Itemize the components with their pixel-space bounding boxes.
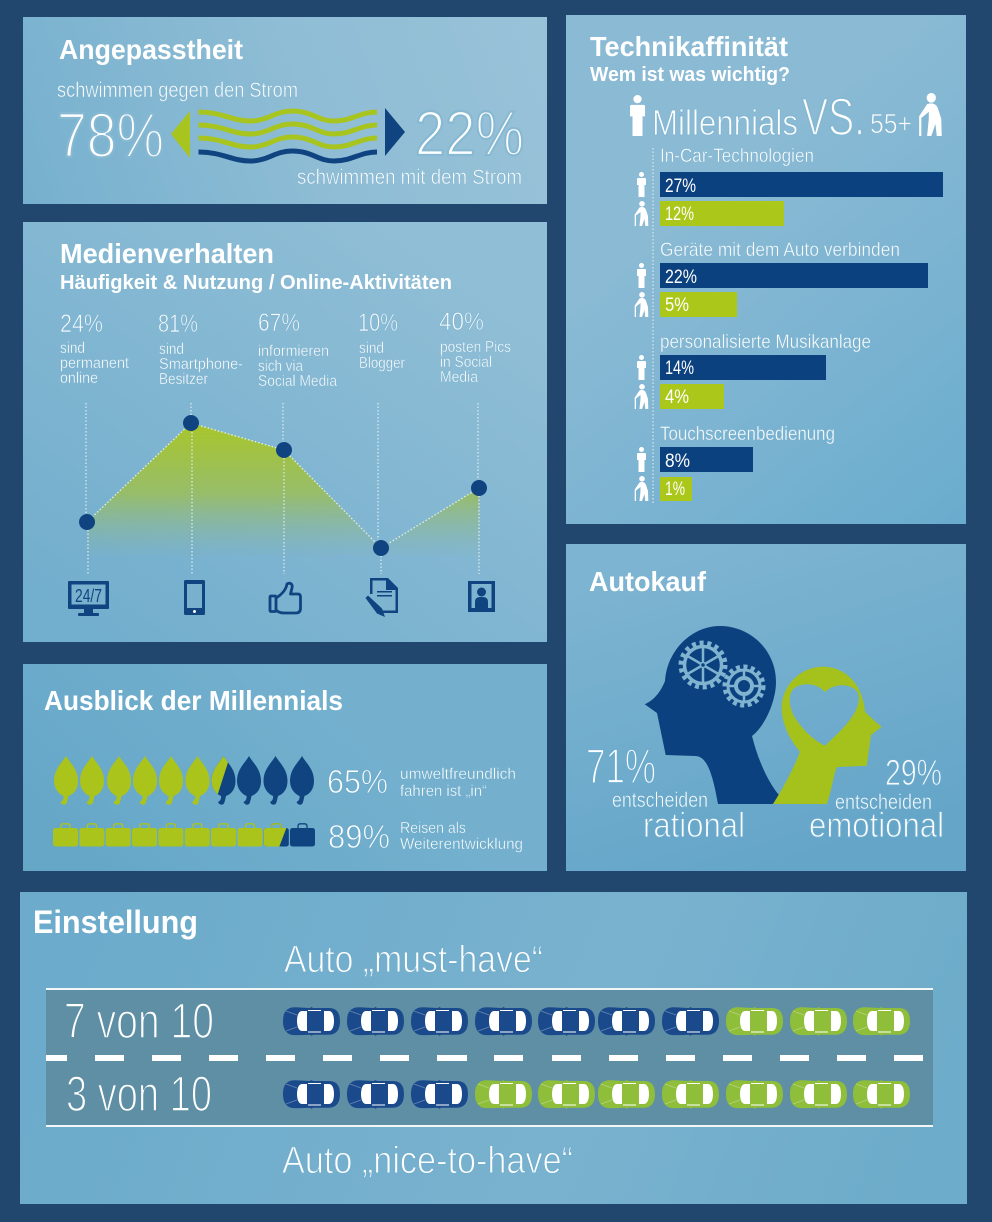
bar group: Geräte mit dem Auto verbinden: 5% [665,295,689,316]
bar group: Geräte mit dem Auto verbinden [635,239,928,317]
stat: 29% entscheiden emotional: 29% [885,752,942,793]
bar group: In-Car-Technologien: 12% [665,204,694,225]
stat: 3 von 10: 3 von 10 [66,1066,212,1122]
icon: green head with heart [773,667,882,804]
stat column: 24% [60,310,130,387]
stat column: 67%: Social Media [258,373,337,390]
icon: small gear [725,667,763,705]
text: umweltfreundlich fahren: fahren ist „in“ [400,783,487,800]
car row: 7 von 10 blue [283,1007,910,1036]
road [46,988,933,1127]
icon: large gear [681,643,725,687]
stat column: 81% [158,310,243,388]
heading: Autokauf: Autokauf [589,566,707,597]
icon: monitor 24/7: 24/7 [75,586,102,606]
heading: Medienverhalten: Medienverhalten [60,238,274,269]
icon: smartphone [184,580,205,615]
heading: Einstellung: Einstellung [33,904,198,940]
text: umweltfreundlich fahren: umweltfreundlich [400,766,516,783]
stat column: 10%: sind [359,340,384,357]
stat column: 10%: 10% [358,309,398,337]
text: Reisen als Weiterentwicklung: Reisen als [400,820,466,837]
text: schwimmen mit dem Strom: schwimmen mit dem Strom [297,166,522,189]
panel: Ausblick der Millennials [23,664,547,871]
stat column: 40%: 40% [439,308,484,336]
stat column: 24%: permanent [60,355,130,372]
icon: portrait photo [468,581,495,612]
stat: 22%: 22% [415,99,524,169]
bar group: Touchscreenbedienung: 8% [665,451,690,472]
bar group: Touchscreenbedienung: 1% [665,479,685,500]
bar group: In-Car-Technologien: In-Car-Technologien [660,145,814,167]
bar group: In-Car-Technologien [635,145,943,226]
stat column: 24%: sind [60,340,85,357]
stat: 29% entscheiden emotional: entscheiden [835,791,932,814]
stat column: 81%: Smartphone- [159,356,243,373]
stat column: 40%: Media [440,369,478,386]
subheading: Häufigkeit & Nutzung / Online-Aktivitäten [60,272,452,294]
icon: document and pencil [366,578,398,617]
panel: Medienverhalten [23,222,547,642]
stat column: 24%: 24% [60,310,103,338]
stat: 78%: 78% [57,101,164,171]
panel: Angepasstheit [23,17,547,204]
icons: suitcases 89% [53,824,315,846]
heading: Angepasstheit: Angepasstheit [59,34,243,65]
icon: thumbs up [270,583,300,613]
icon: waves [198,111,377,161]
bar group: personalisierte Musikanlage: 4% [665,387,689,408]
area chart [79,403,487,574]
subheading: Wem ist was wichtig?: Wem ist was wichtig? [590,64,790,86]
text: VS.: VS. [802,88,865,147]
panel: Einstellung [20,892,967,1204]
text: umweltfreundlich fahren [400,766,516,800]
stat column: 81%: sind [159,341,184,358]
icons: leaves 65% [54,756,314,805]
icon: young person [630,95,645,136]
icon: monitor 24/7 [68,581,109,616]
stat column: 81%: 81% [158,310,198,338]
stat: 89%: 89% [328,818,390,855]
stat column: 67%: sich via [258,358,303,375]
stat: 71% entscheiden rational: rational [643,806,745,845]
bar group: Geräte mit dem Auto verbinden: 22% [665,267,697,288]
stat column: 67%: 67% [258,309,300,337]
stat column: 40% [439,308,511,386]
stat column: 40%: posten Pics [440,339,511,356]
text: Reisen als Weiterentwicklung [400,820,523,853]
text: schwimmen gegen den Strom: schwimmen gegen den Strom [57,79,298,102]
stat: 29% entscheiden emotional: emotional [809,806,944,845]
stat column: 67% [258,309,337,390]
bar group: Touchscreenbedienung [635,423,835,501]
stat column: 67%: informieren [258,343,329,360]
stat: 7 von 10: 7 von 10 [64,993,214,1049]
car row: 3 von 10 blue [283,1080,910,1109]
bar group: Touchscreenbedienung: Touchscreenbedienung [660,423,835,445]
text: Millennials: Millennials [652,102,798,143]
stat column: 40%: in Social [440,354,492,371]
stat: 71% entscheiden rational: entscheiden [612,789,708,812]
stat column: 10% [358,309,405,372]
icon: blue head with gears [645,626,779,804]
bar group: personalisierte Musikanlage [635,331,871,409]
panel: Technikaffinität [566,15,966,524]
stat column: 24%: online [60,370,98,387]
bar group: Geräte mit dem Auto verbinden: Geräte mit dem Auto verbinden [660,239,900,261]
text: Auto nice-to-have: Auto „nice-to-have“ [282,1140,573,1182]
bar group: In-Car-Technologien: 27% [665,176,696,197]
heading: Ausblick der Millennials: Ausblick der Millennials [44,685,343,716]
stat: 71% entscheiden rational [586,740,745,845]
arrow: right navy [385,108,405,156]
stat: 29% entscheiden emotional [809,752,944,845]
text: 55+: 55+ [870,108,912,139]
stat column: 81%: Besitzer [159,371,208,388]
text: Auto must-have: Auto „must-have“ [284,939,543,981]
dotted axis line [652,148,654,503]
text: Reisen als Weiterentwicklung: Weiterentwicklung [400,836,523,853]
stat column: 10%: Blogger [359,355,405,372]
stat: 65%: 65% [327,763,388,800]
icon: older person [919,93,942,136]
bar group: personalisierte Musikanlage: 14% [665,358,694,379]
panel: Autokauf [566,544,966,871]
stat: 71% entscheiden rational: 71% [586,740,656,794]
arrow: left green [171,111,190,158]
bar group: personalisierte Musikanlage: personalisierte Musikanlage [660,331,871,353]
heading: Technikaffinität: Technikaffinität [590,31,788,62]
